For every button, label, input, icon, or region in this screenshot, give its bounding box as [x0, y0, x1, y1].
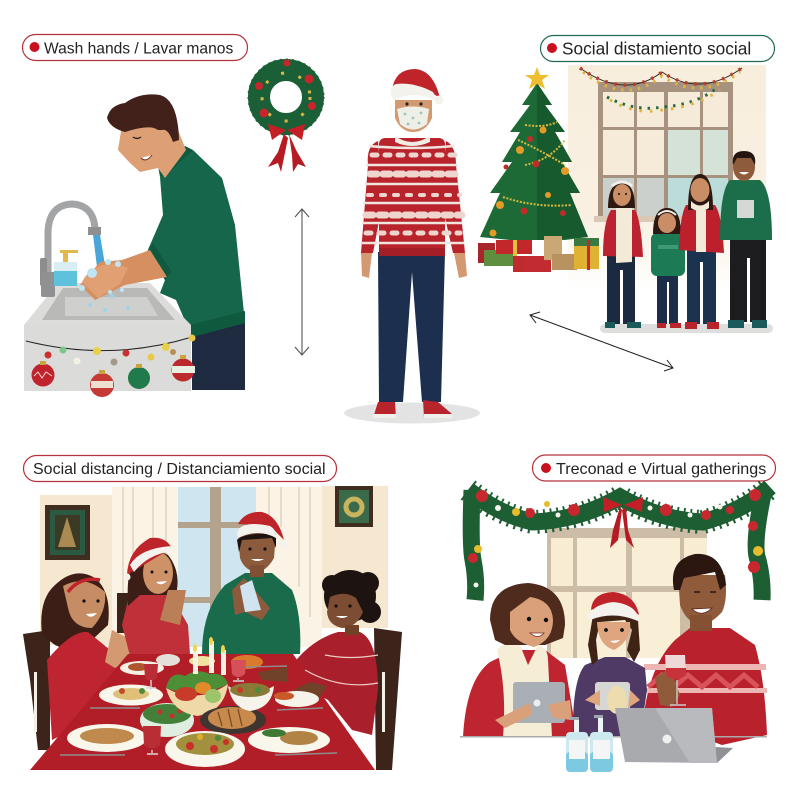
- christmas tree: [480, 67, 588, 240]
- arms: [361, 141, 465, 253]
- person 1: [603, 182, 643, 328]
- person 3: [679, 174, 724, 329]
- shoes: [373, 400, 452, 418]
- chairs: [23, 593, 402, 770]
- legs: [378, 252, 445, 402]
- wine glasses: [143, 660, 246, 754]
- sanitizer bottles: [566, 715, 613, 772]
- person: girl with hat: [122, 538, 190, 656]
- garland lights: [580, 68, 742, 111]
- ground shadow: [344, 402, 480, 424]
- label: virtual gatherings: [532, 455, 776, 481]
- woman left: [463, 583, 577, 737]
- hands: [361, 253, 467, 278]
- person: man green: [202, 512, 300, 654]
- soap bottle: [54, 250, 78, 286]
- wall: [40, 486, 388, 645]
- gifts: [478, 236, 599, 272]
- man's head: [107, 94, 186, 178]
- man's pants: [192, 322, 245, 390]
- picture left: [45, 505, 90, 560]
- window: [547, 528, 707, 658]
- label: social distancing bottom left: Social distancing / Distanciamiento social: [33, 461, 326, 478]
- label: social distancing bottom left: [24, 456, 336, 482]
- person: woman left: [41, 573, 132, 740]
- faucet: [40, 204, 101, 297]
- cutlery: [60, 666, 337, 755]
- garland: [468, 487, 770, 600]
- man's arm: [80, 250, 167, 300]
- girl middle: [573, 592, 647, 737]
- plates and food: [67, 654, 330, 767]
- person: curly hair right: [262, 570, 381, 735]
- head: [395, 90, 432, 132]
- table with red cloth: [30, 654, 375, 770]
- panel: dinner table scene: [23, 486, 402, 770]
- curtains: [112, 487, 322, 647]
- arrow: vertical distance: [295, 209, 309, 355]
- candles: [193, 637, 226, 675]
- panel: virtual gathering scene: [460, 487, 770, 772]
- floor shadow: [600, 324, 773, 333]
- panel: washing hands illustration: [24, 94, 245, 397]
- hands on table: [258, 667, 327, 700]
- window: [178, 487, 256, 647]
- sink counter: [24, 283, 191, 391]
- table line: [460, 736, 767, 738]
- person 4: [720, 151, 772, 328]
- arrow: diagonal distance: [530, 312, 673, 371]
- sweater: [379, 138, 445, 255]
- ornaments: [32, 355, 195, 397]
- hands with foam: [79, 259, 128, 298]
- label: social distancing top right: [540, 36, 774, 62]
- sweater pattern: [362, 146, 464, 256]
- picture right: [335, 486, 373, 527]
- water: [93, 235, 105, 267]
- laptop: [615, 708, 733, 763]
- icon: wreath: [249, 60, 323, 172]
- man right: [642, 554, 767, 745]
- wine glass: [665, 655, 686, 705]
- label: wash hands: Wash hands / Lavar manos: [44, 40, 233, 58]
- collar: [395, 136, 430, 146]
- man's green sweater: [147, 146, 245, 337]
- label: social distancing top right: Social distamiento social: [562, 38, 751, 58]
- face mask: [397, 106, 429, 130]
- label: wash hands: [22, 34, 248, 60]
- panel: family with tree: [478, 65, 773, 333]
- label: virtual gatherings: Treconad e Virtual gatherings: [556, 460, 766, 478]
- string of lights: [26, 334, 196, 366]
- panel: standing masked person: [344, 69, 480, 424]
- window: [594, 82, 736, 222]
- room wall: [568, 65, 766, 290]
- person 2 child: [651, 208, 685, 328]
- santa hat: [391, 69, 444, 104]
